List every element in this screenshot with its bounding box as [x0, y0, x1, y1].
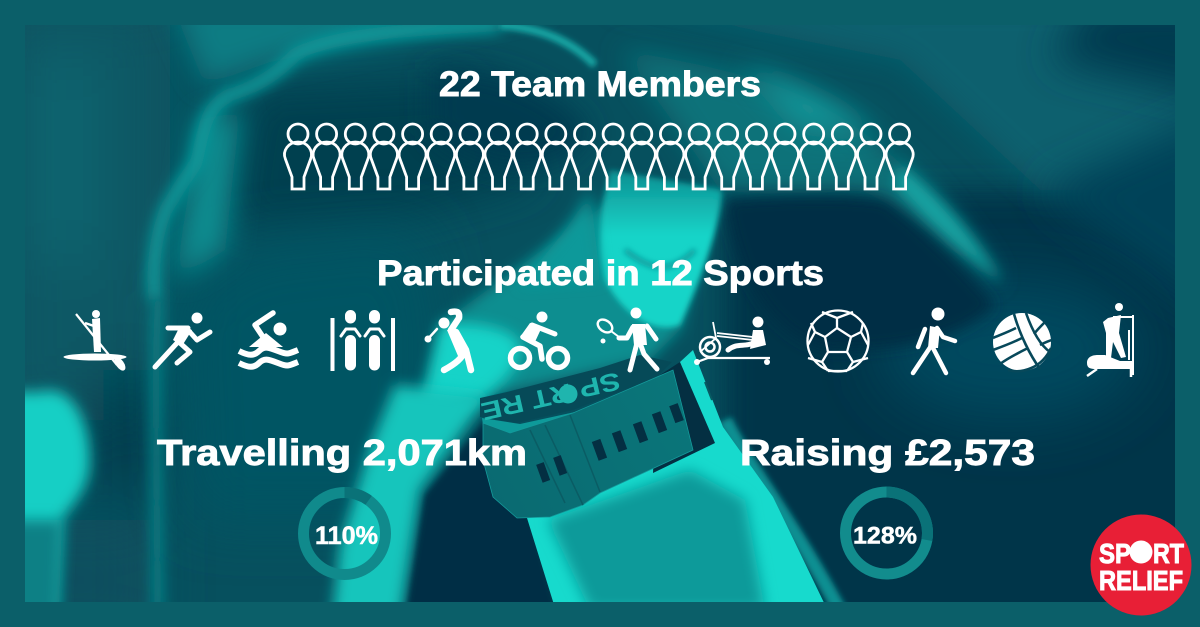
hand rim light: [154, 25, 500, 300]
logo: sport relief: RELIEF: [1099, 565, 1183, 596]
icon: elliptical trainer: [1087, 303, 1134, 377]
icon: swimming: [239, 313, 298, 367]
icon row: sports: [64, 303, 1134, 377]
icon: football: [808, 310, 868, 372]
stat: raising: Raising £2,573: [740, 432, 1035, 473]
ring: 110 percent: [304, 492, 386, 574]
arm hair edge: [720, 415, 847, 602]
lighter knuckle patch: [175, 110, 240, 280]
dark inner hand: [242, 82, 512, 224]
title: 22 team members: 22 Team Members: [439, 65, 761, 104]
left blurred area: [25, 25, 148, 491]
logo: sport relief: [1090, 514, 1192, 616]
heading: participated in 12 sports: Participated in 12 Sports: [377, 254, 824, 293]
stat: travelling: Travelling 2,071km: [157, 432, 527, 473]
bracelet: [480, 355, 666, 418]
icon: golf: [424, 312, 471, 370]
watch strap: [483, 370, 693, 518]
lit finger band: [620, 50, 1000, 285]
icon: running: [155, 312, 210, 367]
icon: rowing machine: [694, 316, 770, 365]
people row: 22 figures: [284, 124, 913, 189]
arm shaded centre: [548, 470, 765, 610]
watch case: [653, 362, 715, 473]
dark area left of wrist: [404, 420, 553, 602]
lit palm strip to bottom: [330, 385, 490, 627]
top soft light: [169, 25, 442, 90]
ring: 110 percent: 110%: [315, 522, 378, 550]
logo: sport relief: SP: [1099, 538, 1131, 569]
icon: walking: [913, 308, 955, 373]
right side dark areas: [725, 190, 1200, 627]
icon: tennis: [595, 308, 657, 370]
icon: volleyball: [993, 313, 1052, 371]
ring: 128 percent: 128%: [853, 522, 917, 550]
logo: sport relief: RT: [1153, 538, 1184, 569]
icon: paddleboarding: [64, 310, 128, 372]
ring: 128 percent: [846, 492, 928, 574]
icon: cycling: [510, 312, 568, 368]
background photo of wrist: SP RT RE: [478, 366, 623, 425]
icon: skittles: [330, 310, 395, 371]
wrist hand lit area: [420, 190, 720, 400]
arm: [527, 350, 824, 602]
